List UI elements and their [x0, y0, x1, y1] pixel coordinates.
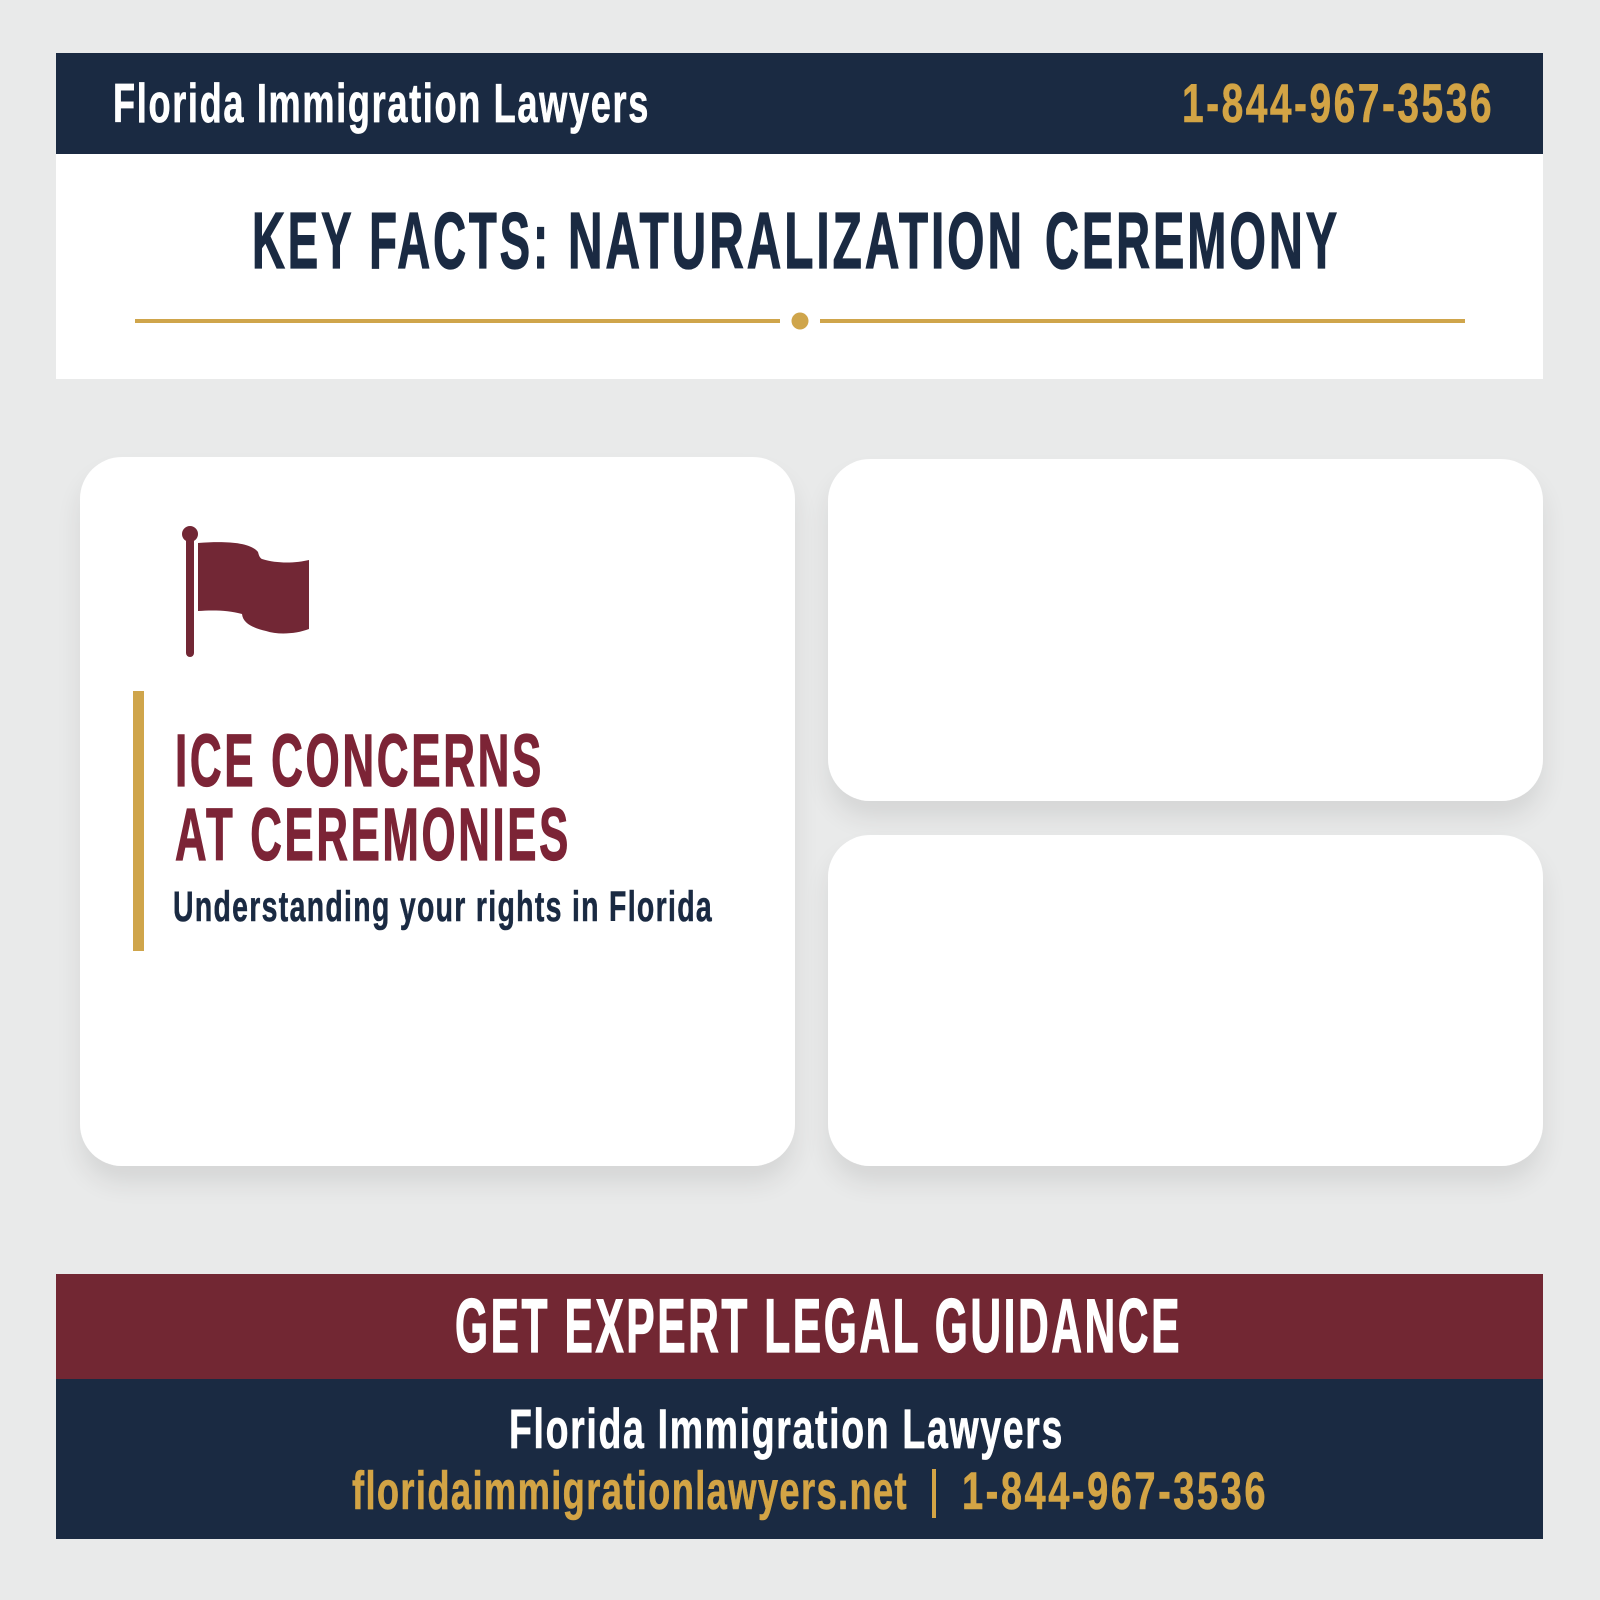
- footer phone: 1-844-967-3536: [962, 1462, 1268, 1521]
- heading: [175, 719, 571, 876]
- call to action banner: [56, 1274, 1543, 1379]
- panel: top right card: [828, 459, 1543, 801]
- title: CEREMONY: [1045, 196, 1340, 285]
- title: NATURALIZATION: [568, 196, 1025, 285]
- panel: bottom right card: [828, 835, 1543, 1166]
- gold divider: [135, 312, 1465, 330]
- header bar: [56, 53, 1543, 154]
- heading: ICE CONCERNS: [175, 719, 544, 802]
- subheading: Understanding your rights in Florida: [173, 883, 713, 931]
- icon: flag: [182, 526, 309, 657]
- footer contact: [56, 1379, 1543, 1539]
- footer firm name: Florida Immigration Lawyers: [509, 1397, 1064, 1460]
- heading: AT CEREMONIES: [175, 793, 571, 876]
- panel: left card: [80, 457, 795, 1166]
- title panel: [56, 154, 1543, 379]
- title: KEY FACTS:: [252, 196, 551, 285]
- gold accent bar: [133, 691, 144, 951]
- footer website: floridaimmigrationlawyers.net: [352, 1461, 908, 1521]
- footer separator: [932, 1469, 936, 1518]
- firm name: Florida Immigration Lawyers: [113, 72, 650, 134]
